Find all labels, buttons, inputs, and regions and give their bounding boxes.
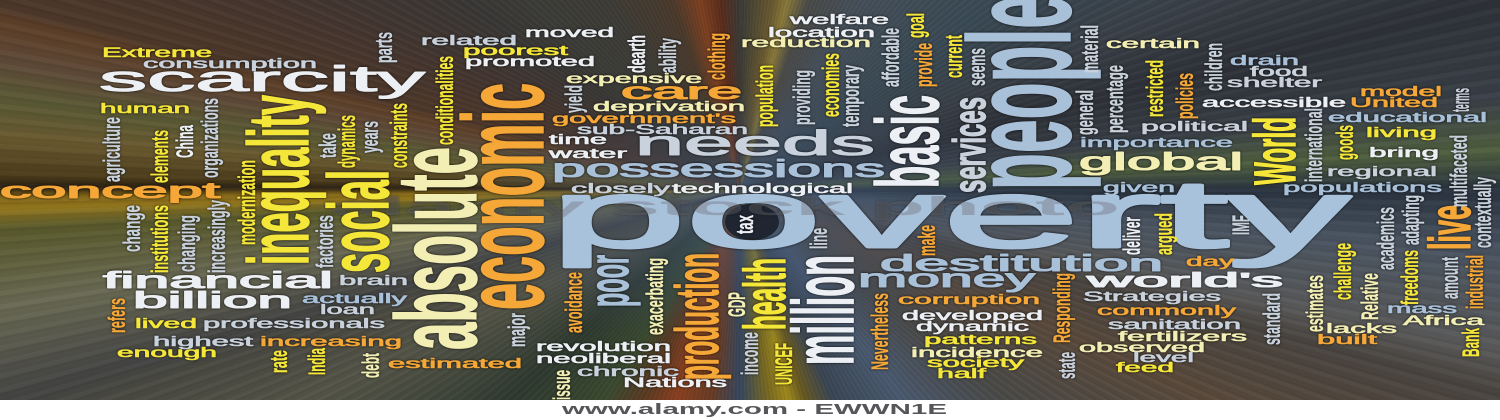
horizontal small words: enough: [117, 345, 217, 360]
horizontal small words: chronic: [577, 364, 680, 379]
horizontal small words: educational: [1328, 110, 1487, 125]
vertical small words: modernization: [234, 160, 261, 245]
word cloud: production: [664, 253, 731, 380]
vertical small words: standard: [1259, 293, 1286, 345]
horizontal small words: regional: [1327, 164, 1437, 179]
vertical small words: institutions: [147, 205, 174, 273]
horizontal small words: welfare: [788, 12, 889, 27]
horizontal small words: model: [1360, 84, 1442, 99]
vertical small words: providing: [789, 70, 816, 125]
horizontal small words: estimated: [388, 356, 522, 371]
word cloud: live: [1418, 205, 1483, 250]
word: needs: needs: [635, 124, 875, 163]
dark counter behind tax: [725, 204, 779, 240]
vertical small words: provide: [911, 43, 938, 87]
vertical small words: exacerbating: [642, 258, 669, 335]
vertical small words: GDP: [724, 292, 751, 317]
horizontal small words: Extreme: [102, 45, 212, 60]
horizontal small words: society: [927, 355, 1025, 370]
horizontal small words: patterns: [924, 332, 1038, 347]
horizontal small words: highest: [153, 334, 254, 349]
vertical small words: avoidance: [561, 272, 588, 333]
word: global: global: [1079, 148, 1243, 176]
vertical small words: industrial: [1462, 255, 1489, 309]
horizontal small words: populations: [1283, 180, 1443, 195]
word: possessions: possessions: [552, 155, 885, 183]
horizontal small words: day: [1186, 254, 1235, 269]
vertical small words: state: [1054, 352, 1081, 379]
horizontal small words: brain: [339, 273, 408, 288]
horizontal small words: actually: [302, 291, 408, 306]
footer strip: [0, 400, 1500, 420]
vertical small words: ability: [655, 38, 682, 73]
horizontal small words: Africa: [1403, 313, 1485, 328]
vertical small words: Responding: [1049, 273, 1076, 343]
vertical small words: freedoms: [1397, 250, 1424, 305]
vertical small words: income: [737, 332, 764, 375]
horizontal small words: fertilizers: [1118, 329, 1248, 344]
horizontal small words: level: [1133, 350, 1194, 365]
vertical small words: change: [119, 205, 146, 252]
horizontal small words: observed: [1079, 340, 1205, 355]
word: concept: concept: [0, 178, 220, 203]
horizontal small words: food: [1250, 64, 1308, 79]
horizontal small words: consumption: [143, 56, 317, 71]
horizontal small words: deprivation: [593, 99, 745, 114]
vertical small words: elements: [147, 130, 174, 183]
horizontal small words: lacks: [1326, 321, 1398, 336]
vertical small words: deliver: [1119, 217, 1146, 255]
vertical small words: debt: [358, 353, 385, 378]
horizontal small words: dynamic: [916, 319, 1030, 334]
horizontal small words: related: [421, 33, 517, 48]
horizontal small words: Strategies: [1083, 289, 1222, 304]
vertical small words: rate: [266, 350, 293, 373]
vertical small words: temporary: [838, 65, 865, 127]
horizontal small words: human: [100, 101, 190, 116]
word cloud: million: [776, 255, 872, 365]
vertical small words: constraints: [386, 103, 413, 168]
word cloud: social: [312, 170, 407, 273]
vertical small words: make: [914, 225, 941, 256]
word: destitution: destitution: [880, 250, 1163, 276]
vertical small words: IMF: [1228, 215, 1255, 235]
vertical small words: academics: [1373, 207, 1400, 270]
vertical small words: amount: [1437, 257, 1464, 299]
word: scarcity: scarcity: [99, 58, 425, 99]
horizontal small words: given: [1103, 180, 1175, 195]
vertical small words: UNICEF: [771, 343, 798, 385]
vertical small words: take: [315, 133, 342, 158]
vertical small words: population: [752, 65, 779, 127]
word cloud: health: [733, 258, 798, 330]
vertical small words: Relative: [1357, 273, 1384, 320]
vertical small words: adapting: [1398, 195, 1425, 245]
vertical small words: dearth: [624, 35, 651, 73]
horizontal small words: half: [937, 366, 987, 381]
vertical small words: factories: [312, 215, 339, 268]
horizontal small words: developed: [902, 308, 1043, 323]
word cloud: World: [1243, 117, 1308, 185]
vertical small words: Nevertheless: [867, 293, 894, 370]
vertical small words: children: [1201, 43, 1228, 91]
vertical small words: increasingly: [204, 200, 231, 273]
vertical small words: policies: [1172, 73, 1199, 119]
vertical small words: parts: [371, 32, 398, 63]
horizontal small words: Nations: [623, 375, 728, 390]
horizontal small words: poorest: [463, 43, 569, 58]
horizontal small words: moved: [525, 25, 614, 40]
vertical small words: issue: [549, 370, 576, 400]
vertical small words: refers: [104, 298, 131, 333]
word: care: care: [621, 78, 742, 104]
horizontal small words: feed: [1116, 360, 1174, 375]
vertical small words: line: [806, 228, 833, 249]
horizontal small words: drain: [1230, 53, 1299, 68]
horizontal small words: United: [1350, 95, 1438, 110]
word: world's: world's: [1084, 270, 1283, 292]
vertical small words: general: [1072, 90, 1099, 135]
vertical small words: argued: [1151, 213, 1178, 255]
horizontal small words: importance: [1080, 135, 1233, 150]
footer credit text: www.alamy.com - EWWN1E: [560, 401, 947, 418]
vertical small words: changing: [174, 215, 201, 272]
horizontal small words: built: [1317, 332, 1378, 347]
horizontal small words: neoliberal: [536, 351, 671, 366]
vertical small words: tax: [732, 215, 759, 234]
horizontal small words: increasing: [260, 334, 402, 349]
horizontal small words: revolution: [536, 339, 671, 354]
vertical small words: contextually: [1470, 177, 1497, 248]
horizontal small words: commonly: [1097, 303, 1237, 318]
horizontal small words: living: [1366, 125, 1437, 140]
vertical small words: India: [304, 348, 331, 375]
vertical small words: international: [1301, 108, 1328, 182]
horizontal small words: promoted: [465, 54, 595, 69]
horizontal small words: sub-Saharan: [577, 122, 748, 137]
word: money: money: [858, 265, 1036, 293]
vertical small words: yield: [561, 85, 588, 113]
horizontal small words: expensive: [566, 71, 702, 86]
vertical small words: organizations: [197, 98, 224, 178]
word: billion: billion: [133, 287, 292, 313]
horizontal small words: professionals: [203, 316, 386, 331]
horizontal small words: loan: [320, 302, 375, 317]
horizontal small words: shelter: [1227, 75, 1323, 90]
horizontal small words: corruption: [898, 292, 1040, 307]
horizontal small words: technological: [672, 181, 853, 196]
headline word: poverty: poverty: [550, 161, 1350, 268]
horizontal small words: incidence: [911, 345, 1043, 360]
horizontal small words: political: [1141, 119, 1248, 134]
vertical small words: China: [172, 125, 199, 158]
horizontal small words: sanitation: [1108, 317, 1241, 332]
horizontal small words: location: [768, 25, 875, 40]
vertical small words: restricted: [1142, 60, 1169, 117]
vertical small words: major: [504, 313, 531, 347]
vertical small words: estimates: [1302, 275, 1329, 332]
horizontal small words: mass: [1387, 301, 1458, 316]
horizontal small words: reduction: [741, 35, 871, 50]
horizontal small words: accessible: [1202, 95, 1346, 110]
vertical small words: years: [357, 121, 384, 153]
horizontal small words: water: [547, 146, 628, 161]
horizontal small words: government's: [552, 111, 737, 126]
vertical small words: challenge: [1330, 243, 1357, 300]
word cloud: poor: [577, 255, 641, 307]
word: financial: financial: [103, 267, 333, 293]
word: services: services: [944, 97, 995, 193]
vertical small words: dynamics: [334, 115, 361, 168]
horizontal small words: time: [549, 132, 607, 147]
vertical small words: percentage: [1102, 65, 1129, 133]
vertical small words: seems: [964, 48, 991, 86]
horizontal small words: lived: [135, 316, 197, 331]
horizontal small words: certain: [1106, 36, 1200, 51]
horizontal small words: bring: [1369, 145, 1439, 160]
vertical small words: terms: [1448, 88, 1475, 112]
vertical small words: agriculture: [99, 117, 126, 182]
vertical small words: multifaceted: [1446, 135, 1473, 207]
horizontal small words: closely: [571, 181, 671, 196]
vertical small words: Bank: [1458, 328, 1485, 357]
vertical small words: goods: [1332, 125, 1359, 160]
watermark: stock photo: alamy stock photo: [330, 191, 1120, 221]
